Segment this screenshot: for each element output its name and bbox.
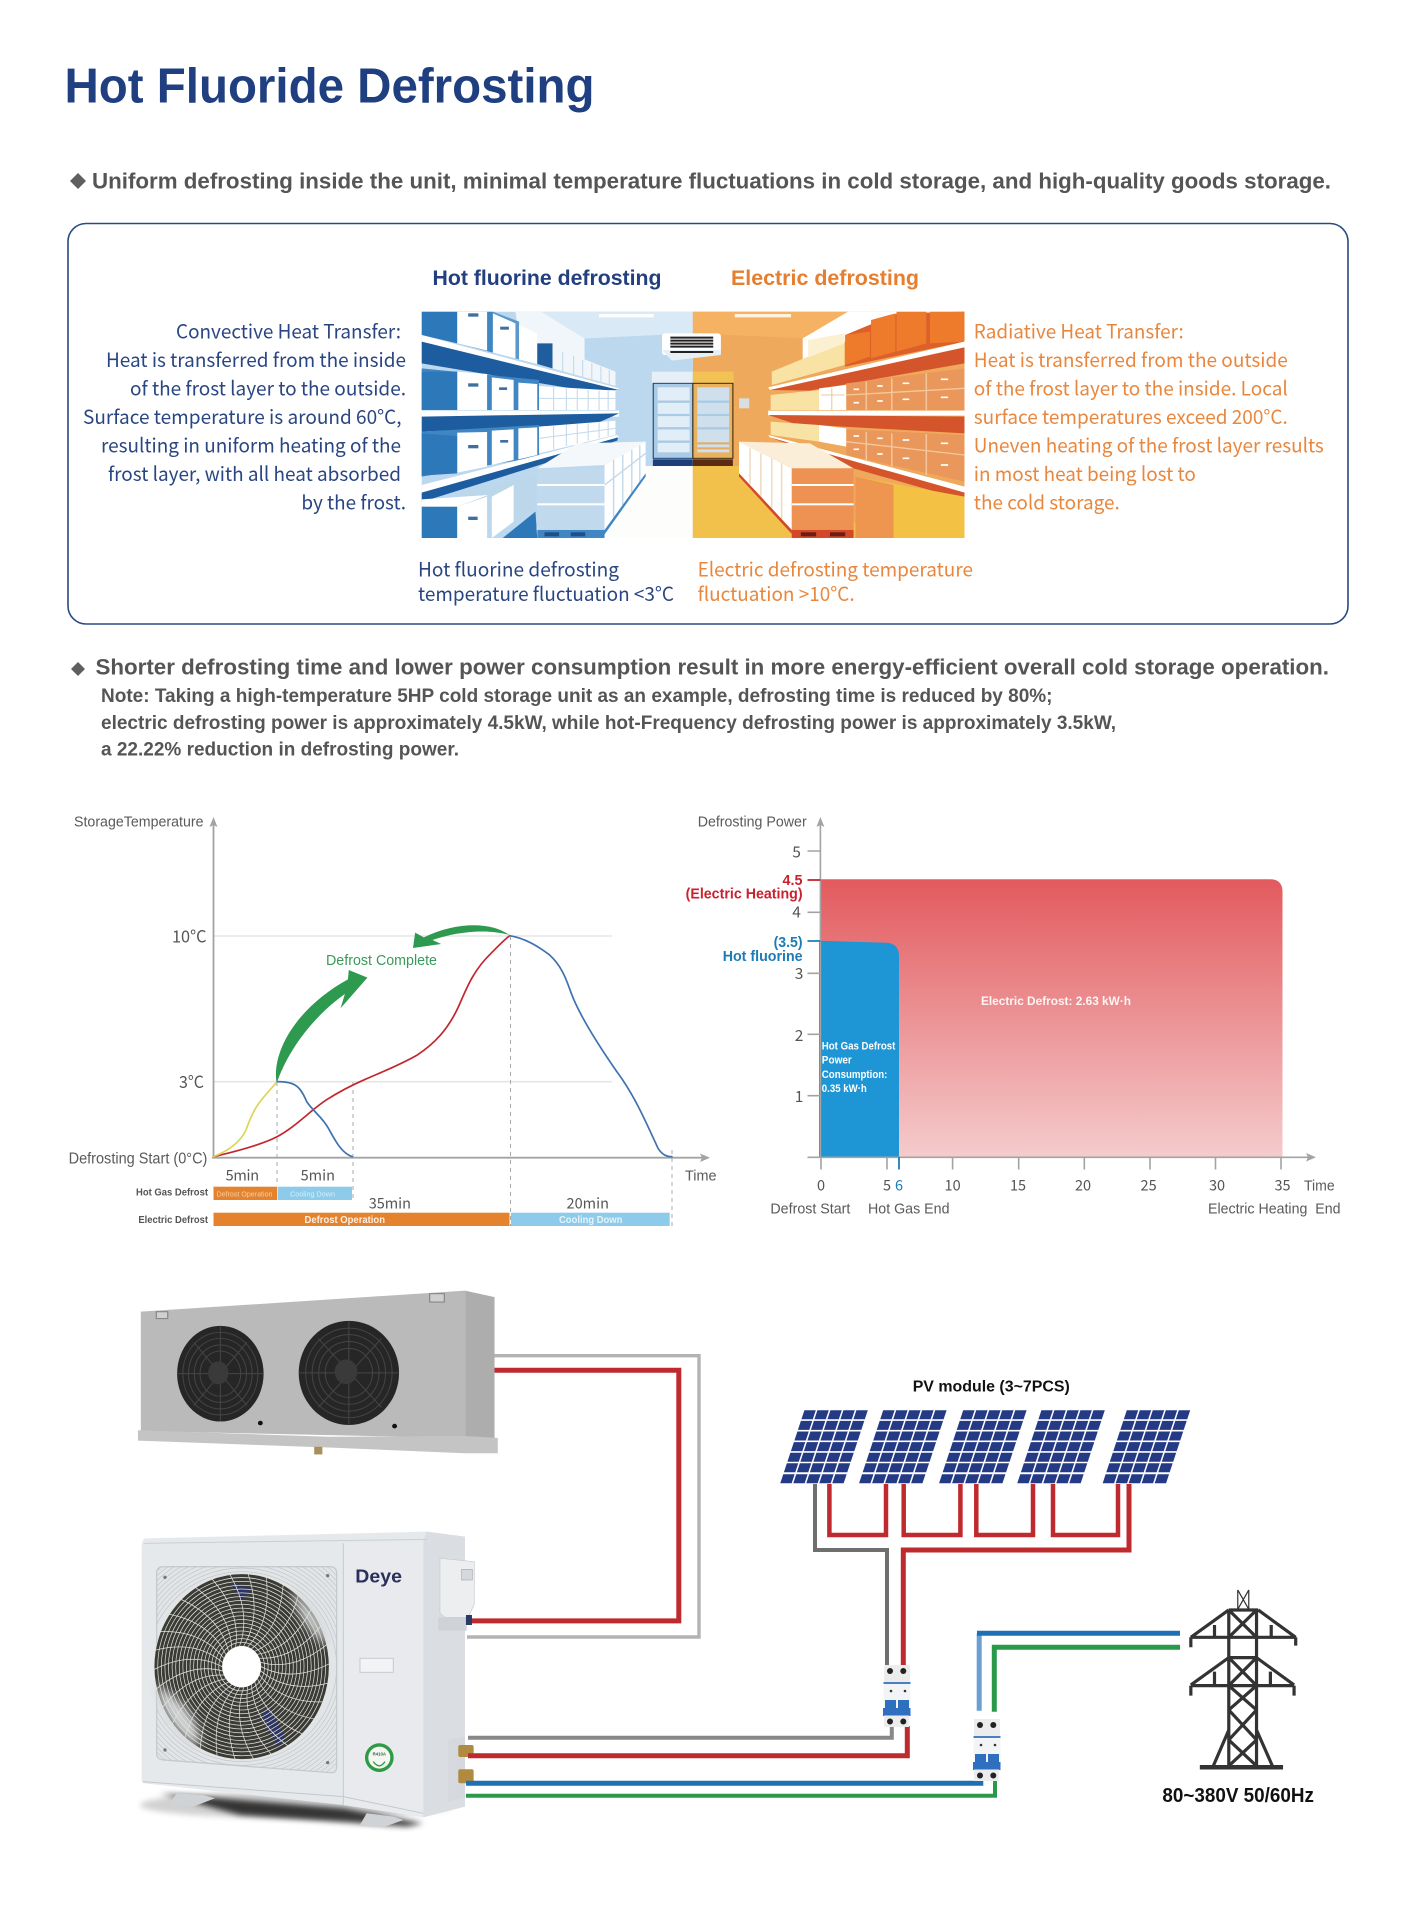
timeline: electric defrost <box>138 1213 670 1226</box>
panel: defrosting comparison <box>68 224 1348 624</box>
icon: power tower <box>1191 1590 1296 1767</box>
bullet heading: uniform defrosting: Uniform defrosting inside the unit, minimal temperature fluctuations in cold storage, and high-quality goods storage. <box>92 168 1331 193</box>
line chart: storage temperature: Defrosting Start (0°C) <box>69 1150 207 1167</box>
icon: breaker for PV <box>883 1665 910 1727</box>
labels: StorageTemperature <box>74 815 204 831</box>
text block: radiative heat transfer <box>974 315 1324 515</box>
caption: hot fluorine fluctuation: Hot fluorine defrosting <box>418 554 619 583</box>
callout: hot gas consumption: Consumption: <box>822 1069 887 1081</box>
text block: radiative heat transfer: in most heat being lost to <box>974 458 1196 487</box>
area chart: defrosting power: Electric Heating End <box>1208 1202 1340 1218</box>
note text <box>101 686 1116 761</box>
x axis labels: 5 <box>883 1174 891 1196</box>
x axis labels: 25 <box>1141 1174 1157 1196</box>
line chart: storage temperature: 20min <box>566 1192 609 1213</box>
area chart: defrosting power: 4 <box>792 900 801 922</box>
bullet heading: shorter defrosting time: Shorter defrosting time and lower power consumption result in more energy-efficient overall cold storage operation. <box>96 654 1329 679</box>
text block: convective heat transfer: frost layer, with all heat absorbed <box>108 458 401 487</box>
x axis labels: 35 <box>1274 1174 1291 1196</box>
line chart: storage temperature: 5min <box>301 1165 335 1186</box>
curve: hot gas cooling <box>277 1082 352 1157</box>
note text: Note: Taking a high-temperature 5HP cold storage unit as an example, defrosting time is reduced by 80%; <box>101 686 1052 707</box>
text block: radiative heat transfer: Radiative Heat Transfer: <box>974 315 1184 344</box>
axes and ticks <box>808 822 1312 1170</box>
line chart: storage temperature: 3°C <box>179 1068 204 1093</box>
icon: breaker for grid <box>973 1719 1000 1781</box>
area: electric heating <box>820 879 1282 1157</box>
area chart: defrosting power <box>686 815 1340 1218</box>
area chart: defrosting power: 3 <box>795 962 803 984</box>
badge: R410A: R410A <box>373 1752 387 1757</box>
area chart: defrosting power: (3.5) <box>774 935 803 951</box>
icon: evaporator unit <box>138 1291 498 1454</box>
text block: convective heat transfer: Convective Heat Transfer: <box>176 315 401 344</box>
curve: electric cooling <box>510 936 672 1157</box>
callout: hot gas consumption: Power <box>822 1054 852 1066</box>
caption: hot fluorine fluctuation: temperature fluctuation <3°C <box>418 578 674 607</box>
text block: convective heat transfer: by the frost. <box>301 486 406 515</box>
x axis labels: 20 <box>1075 1174 1091 1196</box>
heading: electric defrosting: Electric defrosting <box>731 266 919 290</box>
area chart: defrosting power: Hot fluorine <box>723 949 803 965</box>
line chart: storage temperature <box>69 815 717 1226</box>
timeline: electric defrost: Cooling Down <box>559 1214 622 1226</box>
axes and guides <box>210 817 710 1226</box>
text block: radiative heat transfer: Uneven heating of the frost layer results <box>974 429 1324 458</box>
caption: electric fluctuation: fluctuation >10°C. <box>698 578 855 607</box>
y axis labels: Defrosting Power <box>698 815 807 831</box>
wiring: condenser to breakers <box>466 1726 995 1796</box>
logo: Deye: Deye <box>355 1566 402 1587</box>
area chart: defrosting power: 5 <box>792 840 801 862</box>
caption: hot fluorine fluctuation <box>418 554 674 607</box>
text block: radiative heat transfer: of the frost layer to the inside. Local <box>974 372 1288 401</box>
text block: convective heat transfer: resulting in uniform heating of the <box>101 429 401 458</box>
x axis labels <box>817 1174 1291 1196</box>
text block: radiative heat transfer: Heat is transferred from the outside <box>974 344 1288 373</box>
title: Hot Fluoride Defrosting <box>64 59 594 113</box>
text block: convective heat transfer <box>83 315 406 515</box>
timeline: hot gas defrost: Defrost Operation <box>216 1190 272 1198</box>
wiring: grid to breaker <box>977 1633 1180 1712</box>
pipes: refrigerant loop between evaporator and condenser <box>467 1356 699 1637</box>
x axis labels: 15 <box>1010 1174 1026 1196</box>
wiring: PV strings <box>815 1484 1129 1666</box>
text block: radiative heat transfer: the cold storage. <box>974 486 1120 515</box>
text block: convective heat transfer: Surface temperature is around 60°C, <box>83 401 402 430</box>
callout: electric consumption: Electric Defrost: 2.63 kW·h <box>981 996 1131 1008</box>
timeline: electric defrost: Defrost Operation <box>304 1214 385 1226</box>
timeline: hot gas defrost <box>136 1187 352 1200</box>
line chart: storage temperature: 10°C <box>172 923 207 948</box>
line chart: storage temperature: Defrost Complete <box>326 952 437 969</box>
callout: hot gas consumption: Hot Gas Defrost <box>822 1040 896 1052</box>
x axis labels: 30 <box>1209 1174 1225 1196</box>
area chart: defrosting power: 1 <box>795 1085 803 1107</box>
timeline: hot gas defrost: Cooling Down <box>290 1190 335 1198</box>
x axis labels: 0 <box>817 1174 825 1196</box>
curve: hot gas rise <box>213 1082 277 1157</box>
heading: PV module: PV module (3~7PCS) <box>913 1378 1070 1396</box>
area chart: defrosting power: (Electric Heating) <box>686 887 803 903</box>
line chart: storage temperature: Time <box>685 1169 716 1185</box>
icon: PV module panels <box>782 1415 1189 1479</box>
text block: convective heat transfer: Heat is transferred from the inside <box>106 344 406 373</box>
caption: electric fluctuation: Electric defrosting temperature <box>698 554 973 583</box>
arrow: defrost complete returning <box>413 925 509 948</box>
area chart: defrosting power: Defrost Start <box>770 1202 850 1218</box>
curve: electric defrost <box>213 925 672 1157</box>
illustration: cold storage room, blue and orange halves <box>422 312 964 538</box>
icon: condenser outdoor unit <box>106 1531 474 1827</box>
note text: electric defrosting power is approximately 4.5kW, while hot-Frequency defrosting power is approximately 3.5kW, <box>101 713 1116 734</box>
line chart: storage temperature: 35min <box>369 1192 411 1213</box>
text block: radiative heat transfer: surface temperatures exceed 200°C. <box>974 401 1288 430</box>
timeline: hot gas defrost: Hot Gas Defrost <box>136 1187 208 1199</box>
area chart: defrosting power: 2 <box>795 1024 803 1046</box>
fan blades and guard <box>153 1572 331 1761</box>
x axis labels: 10 <box>945 1174 961 1196</box>
note text: a 22.22% reduction in defrosting power. <box>101 740 459 761</box>
heading: hot fluorine defrosting: Hot fluorine defrosting <box>432 266 662 290</box>
line chart: storage temperature: 5min <box>226 1165 259 1186</box>
area chart: defrosting power: Hot Gas End <box>868 1202 950 1218</box>
area chart: defrosting power: 4.5 <box>782 873 802 889</box>
timeline: electric defrost: Electric Defrost <box>138 1214 208 1226</box>
arrow: defrost complete rising <box>276 970 367 1082</box>
caption: electric fluctuation <box>698 554 973 607</box>
badge: R410A <box>365 1743 394 1772</box>
text block: convective heat transfer: of the frost layer to the outside. <box>130 372 406 401</box>
x axis labels: 6 <box>895 1174 903 1196</box>
area: hot fluorine <box>819 941 899 1157</box>
callout: hot gas consumption: 0.35 kW·h <box>822 1083 867 1095</box>
area chart: defrosting power: Time <box>1304 1178 1335 1194</box>
callout: hot gas consumption <box>822 1040 896 1095</box>
label: grid voltage: 80~380V 50/60Hz <box>1162 1785 1314 1807</box>
